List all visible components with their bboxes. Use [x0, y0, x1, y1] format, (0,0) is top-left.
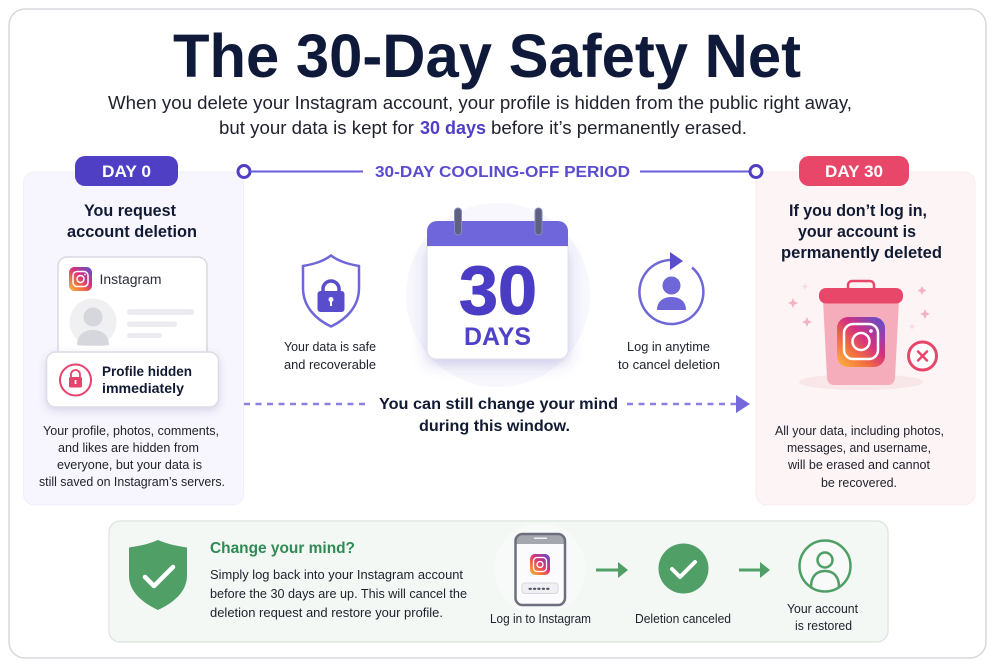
change your mind body: before the 30 days are up. This will cancel the [210, 587, 467, 601]
profile hidden callout [46, 352, 218, 407]
change your mind text [379, 396, 618, 435]
account restored label: is restored [795, 619, 852, 633]
change your mind text: You can still change your mind [379, 396, 618, 413]
step: account restored [787, 540, 859, 633]
log in label [618, 340, 720, 372]
log in label: Log in anytime [627, 340, 710, 354]
arrow: step one to two [596, 562, 628, 578]
calendar unit: DAYS [464, 323, 531, 351]
dashed arrow: left [244, 403, 370, 405]
account restored label: Your account [787, 602, 859, 616]
day 30 badge: DAY 30 [825, 162, 883, 181]
hidden text lines [127, 309, 194, 338]
day 30 heading: your account is [798, 223, 916, 241]
icon: green shield check [129, 540, 187, 610]
icon: instagram logo [69, 267, 92, 291]
data safe label: and recoverable [284, 358, 376, 372]
subtitle: before it’s permanently erased. [491, 117, 747, 138]
timeline: cooling-off period [238, 164, 762, 181]
day 30 badge [799, 156, 909, 186]
instagram profile card [58, 257, 207, 369]
data safe label [284, 340, 376, 372]
icon: trash bin with instagram logo [788, 281, 936, 390]
cooling-off label: 30-DAY COOLING-OFF PERIOD [375, 164, 630, 181]
day 30 description [775, 424, 944, 490]
icon: log in cycle [639, 252, 703, 324]
panel: change your mind [109, 521, 888, 642]
panel: day 0 [24, 156, 244, 505]
step: log in to instagram [490, 523, 591, 626]
callout text: Profile hidden [102, 363, 192, 379]
change your mind body [210, 568, 467, 620]
day 0 description: still saved on Instagram’s servers. [39, 475, 225, 489]
subtitle [108, 92, 852, 138]
day 0 description [39, 424, 225, 489]
blurred avatar [70, 298, 116, 346]
account restored label [787, 602, 859, 633]
change your mind text: during this window. [419, 418, 570, 435]
icon: shield with lock [303, 256, 359, 326]
day 0 heading: You request [84, 202, 176, 220]
day 30 heading: permanently deleted [781, 244, 942, 262]
callout text [102, 363, 192, 396]
day 30 description: All your data, including photos, [775, 424, 944, 438]
day 0 badge: DAY 0 [102, 162, 151, 181]
title: The 30-Day Safety Net [173, 22, 801, 90]
icon: delete cross [908, 342, 936, 370]
subtitle: but your data is kept for [219, 117, 414, 138]
day 30 heading: If you don’t log in, [789, 202, 927, 220]
day 30 description: will be erased and cannot [787, 458, 931, 472]
subtitle: 30 days [420, 117, 486, 138]
log in step label: Log in to Instagram [490, 612, 591, 626]
log in label: to cancel deletion [618, 358, 720, 372]
day 30 description: messages, and username, [787, 441, 931, 455]
day 0 heading: account deletion [67, 223, 197, 241]
dashed arrow: right [627, 395, 750, 413]
callout text: immediately [102, 380, 184, 396]
calendar number: 30 [459, 252, 537, 329]
deletion canceled label: Deletion canceled [635, 612, 731, 626]
step: deletion canceled [635, 544, 731, 626]
arrow: step two to three [739, 562, 770, 578]
day 30 description: be recovered. [821, 476, 897, 490]
panel: day 30 [756, 156, 975, 505]
change your mind body: Simply log back into your Instagram account [210, 568, 464, 582]
step: log in to instagram: ••••• [528, 584, 550, 594]
data safe label: Your data is safe [284, 340, 376, 354]
day 0 description: everyone, but your data is [57, 458, 202, 472]
subtitle: When you delete your Instagram account, your profile is hidden from the public right away, [108, 92, 852, 113]
day 30 heading [781, 202, 942, 262]
change your mind heading: Change your mind? [210, 540, 355, 557]
instagram label: Instagram [100, 272, 162, 287]
day 0 description: and likes are hidden from [58, 441, 199, 455]
day 0 badge [75, 156, 178, 186]
change your mind body: deletion request and restore your profile. [210, 606, 443, 620]
day 0 heading [67, 202, 197, 241]
calendar: 30 days [406, 203, 590, 387]
day 0 description: Your profile, photos, comments, [43, 424, 219, 438]
icon: pink lock [60, 364, 91, 396]
